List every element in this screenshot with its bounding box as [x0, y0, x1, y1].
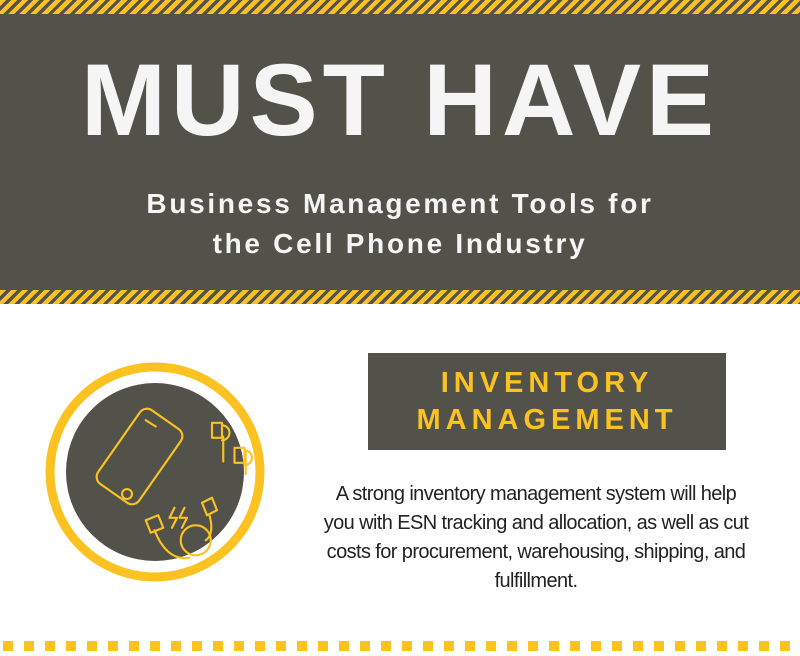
header panel — [0, 0, 800, 304]
subtitle — [146, 188, 654, 259]
heading box: inventory management: INVENTORY — [441, 367, 653, 399]
icon: inventory circle — [46, 362, 264, 582]
title: MUST HAVE — [81, 43, 719, 157]
top stripe band — [0, 0, 800, 14]
bottom dotted border — [3, 641, 800, 651]
subtitle: Business Management Tools for — [146, 188, 654, 219]
bottom stripe band — [0, 290, 800, 304]
heading box: inventory management — [368, 353, 726, 450]
body text: A strong inventory management system will help you with ESN tracking and allocation, as well as cut costs for procurement, warehousing, shipping, and fulfillment. — [324, 483, 748, 592]
heading box: inventory management: MANAGEMENT — [416, 404, 678, 436]
subtitle: the Cell Phone Industry — [213, 228, 587, 259]
